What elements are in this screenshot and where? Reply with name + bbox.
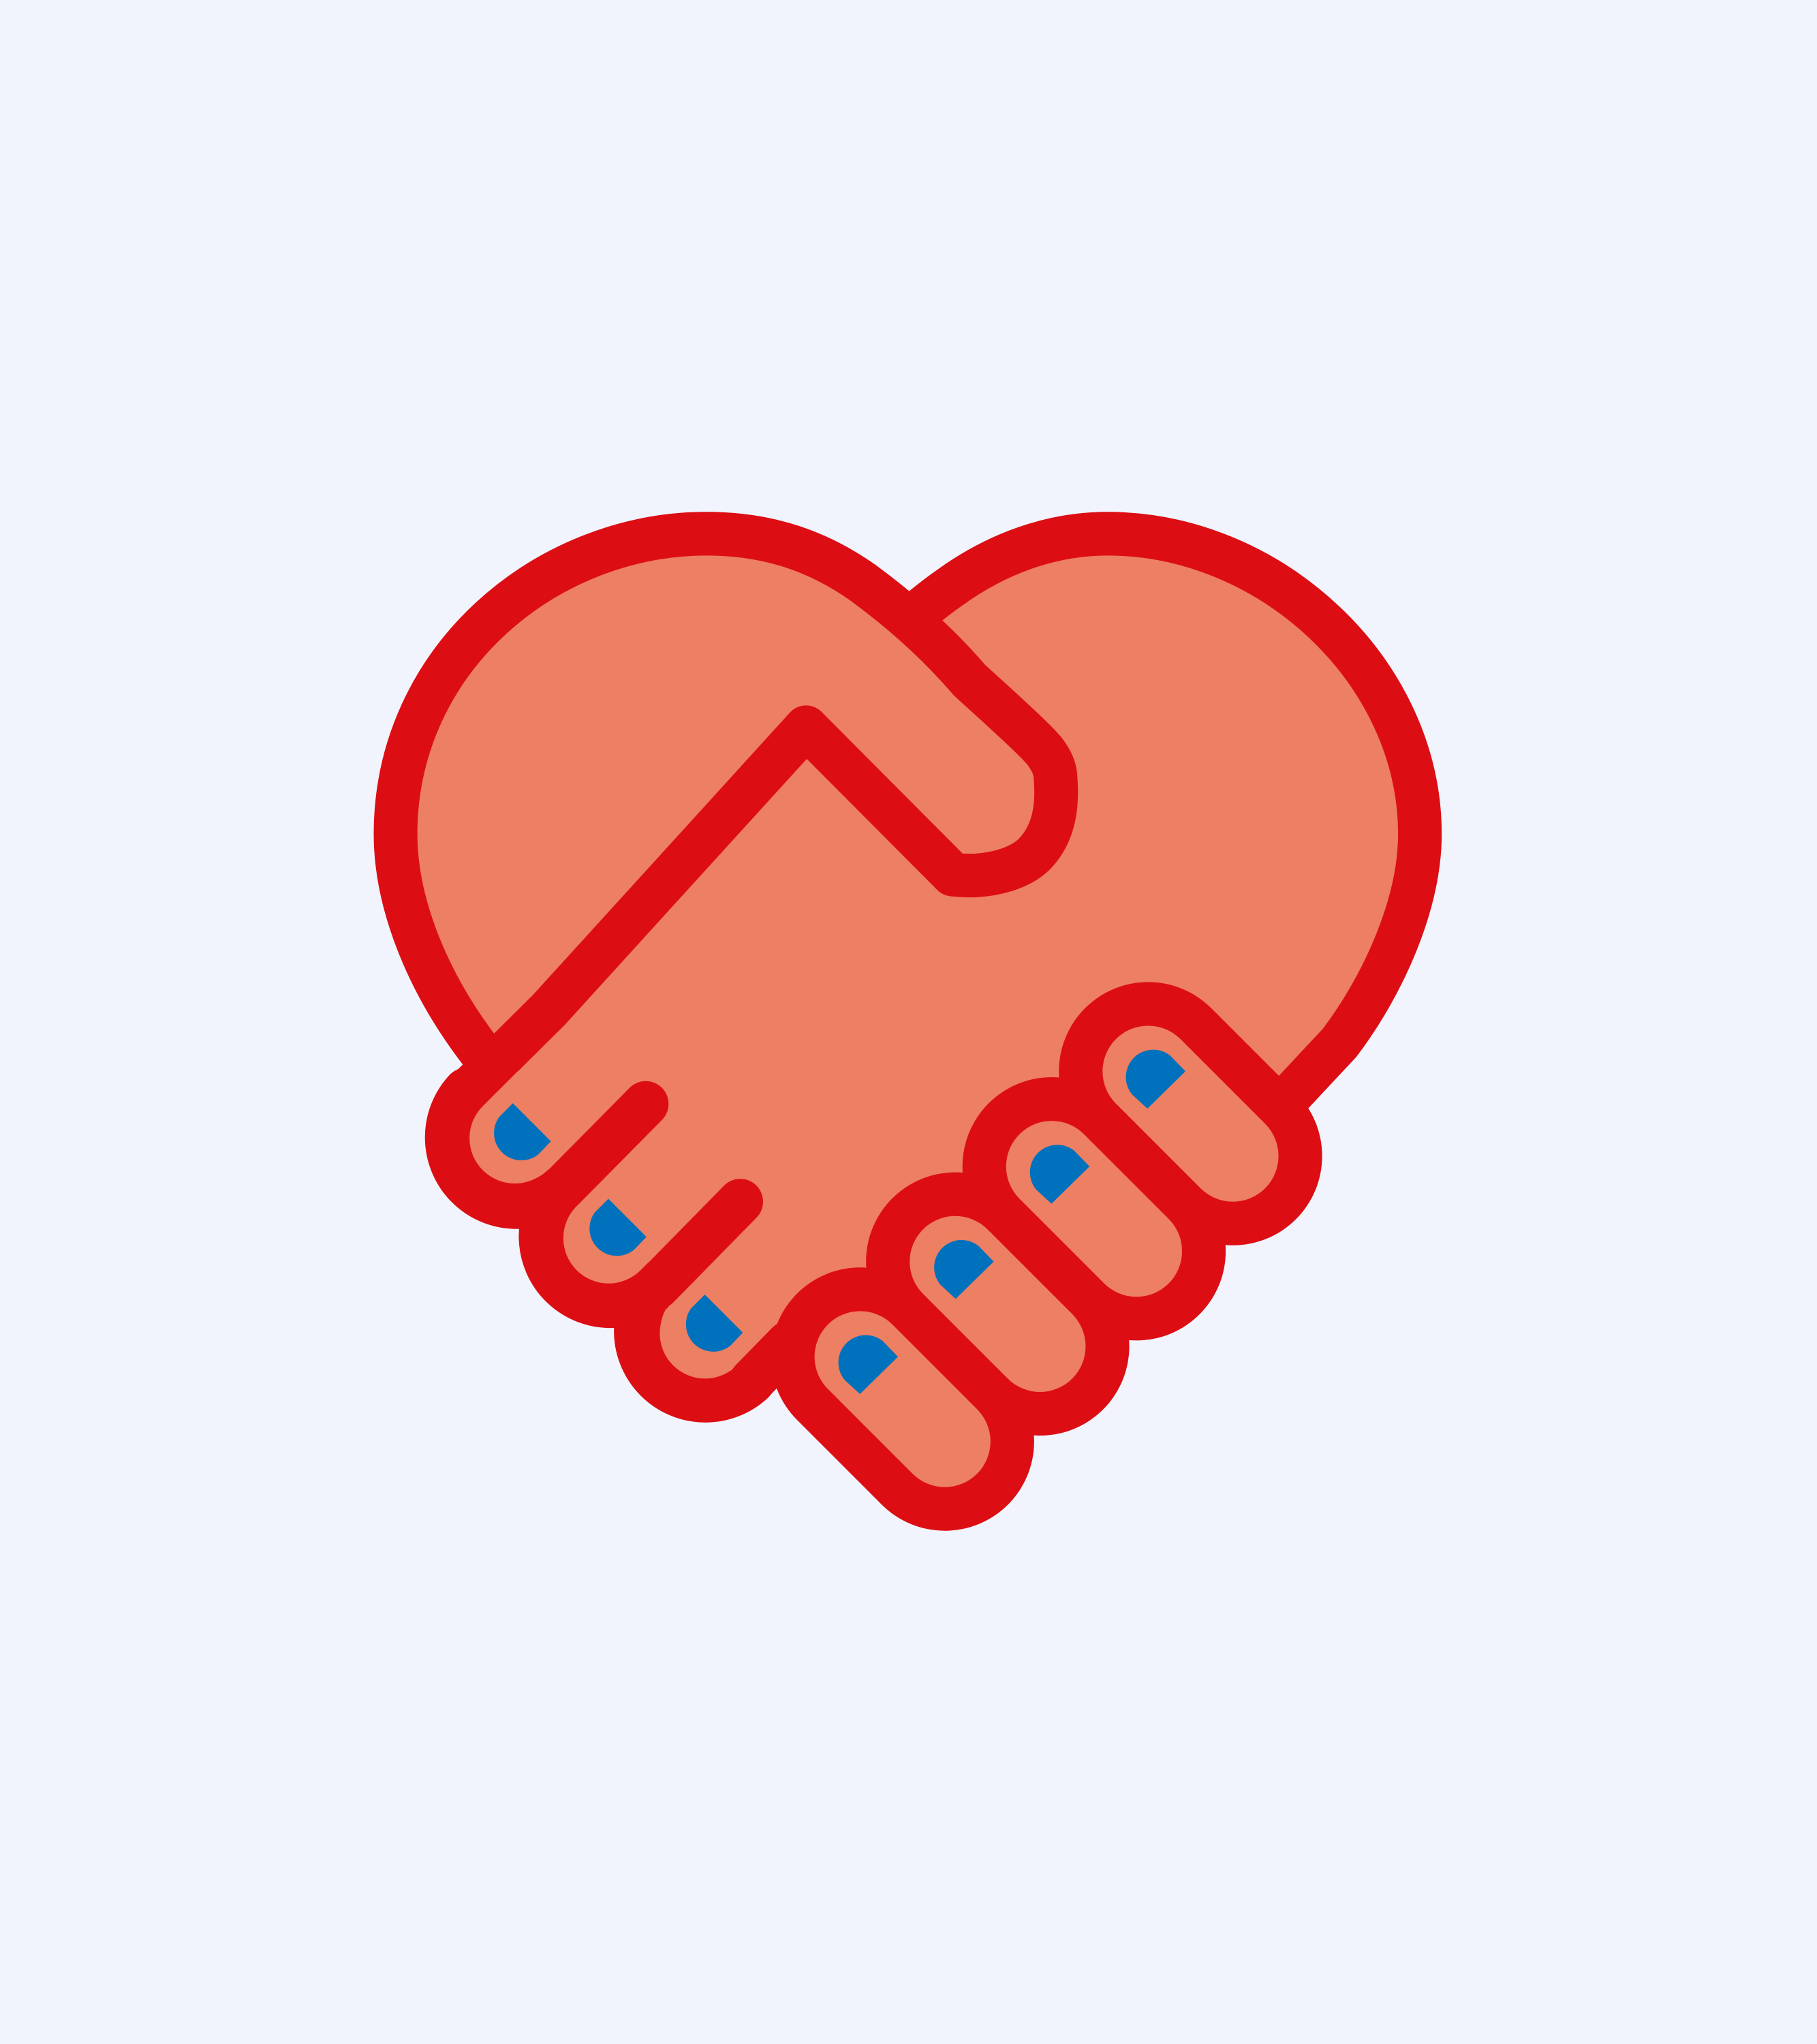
finger outline B (1052, 1166, 1136, 1251)
nail B (1030, 1145, 1089, 1204)
right hand fingernails (839, 1050, 1185, 1394)
fingertip arc 2 (542, 1190, 657, 1305)
left hand outline with thumb (396, 533, 1056, 1090)
finger outline D (860, 1357, 945, 1442)
finger line 2 (657, 1202, 741, 1286)
nail D (839, 1335, 898, 1394)
left hand fingertip arcs (448, 1091, 752, 1399)
fingertip arc 1 (448, 1091, 563, 1206)
finger fill A (1148, 1071, 1233, 1156)
finger fill C (955, 1262, 1040, 1346)
left hand finger lines (563, 1104, 788, 1381)
finger line 3 (752, 1344, 788, 1381)
fingertip fill 1 (515, 1106, 547, 1139)
nail 1 (494, 1103, 551, 1160)
nail 2 (589, 1198, 647, 1256)
left hand fingernails (494, 1103, 743, 1352)
finger outline C (955, 1262, 1040, 1346)
finger fill B (1052, 1166, 1136, 1251)
fingertip fill 2 (608, 1205, 641, 1238)
fingertip arc 3 (637, 1284, 752, 1399)
finger outline A (1148, 1071, 1233, 1156)
right hand finger fills (860, 1071, 1233, 1442)
fingertip fill 3 (705, 1301, 738, 1333)
nail A (1126, 1050, 1185, 1109)
nail C (934, 1240, 994, 1299)
left hand fingertip fills (515, 1106, 738, 1333)
nail 3 (686, 1295, 743, 1352)
right hand back outline (908, 533, 1420, 1102)
heart silhouette fill (396, 533, 1420, 1442)
finger line 1 (563, 1104, 646, 1188)
finger fill D (860, 1357, 945, 1442)
right hand finger outlines (860, 1071, 1233, 1442)
